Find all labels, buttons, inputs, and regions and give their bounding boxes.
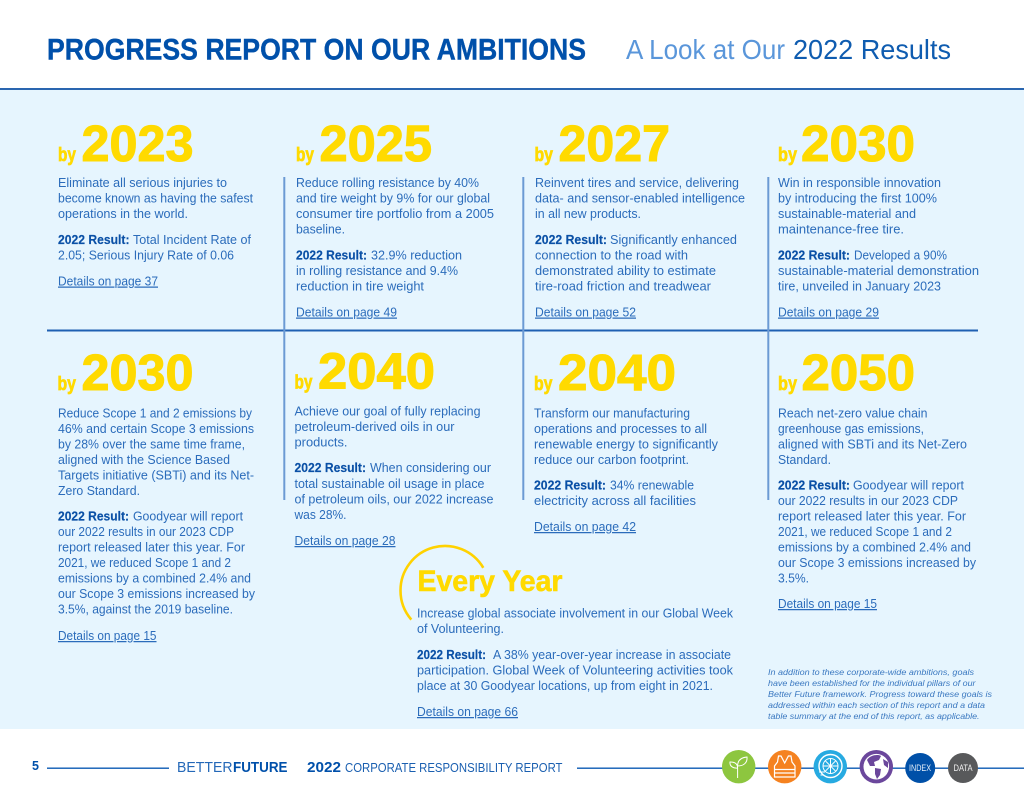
2022 result: 2022 Result: [58,233,130,247]
2022 result [296,248,462,294]
ambition text: and tire weight by 9% for our global [296,192,490,206]
2022 result: Goodyear will report [853,478,965,492]
panel: by 2027 [534,115,745,320]
icon: green sprout [722,750,755,783]
2022 result [58,233,252,262]
panel: by 2023 [58,115,254,288]
heading: by 2040: by [294,372,313,394]
2022 result: tire, unveiled in January 2023 [778,280,941,294]
heading: by 2030: by [778,145,797,166]
footer [32,750,1024,783]
icon: index button [905,753,935,783]
details link: Details on page 66 [417,705,518,719]
details link: Details on page 28 [294,534,396,548]
2022 result: demonstrated ability to estimate [535,264,716,278]
2022 result: in rolling resistance and 9.4% [296,264,458,278]
2022 result: tire-road friction and treadwear [535,280,711,294]
ambition text [294,404,481,450]
heading: by 2023: 2023 [82,115,194,172]
subtitle: 2022 Results [793,34,951,65]
text block: side note: Better Future framework. Progress toward these goals is [768,690,992,699]
2022 result: 2.05; Serious Injury Rate of 0.06 [58,248,234,262]
details link: Details on page 49 [296,306,397,320]
text block: side note: table summary at the end of this report, as applicable. [768,712,980,721]
2022 result: 2022 Result: [417,648,486,662]
2022 result: 2022 Result: [296,248,367,262]
ambition text: in all new products. [535,207,641,221]
2022 result: Significantly enhanced [610,233,737,247]
heading: by 2025: by [296,145,314,166]
ambition text [778,176,941,236]
ambition text: by 28% over the same time frame, [58,438,245,452]
2022 result: Total Incident Rate of [133,233,252,247]
2022 result: 2022 Result: [778,248,850,262]
ambition text [58,406,254,498]
grid dividers [47,177,978,500]
subtitle [626,34,951,65]
ambition text: Standard. [778,453,831,467]
2022 result [417,648,734,693]
ambition text: Targets initiative (SBTi) and its Net- [58,468,254,482]
ambition text: of Volunteering. [417,622,504,636]
2022 result [534,478,696,508]
ambition text: aligned with the Science Based [58,453,230,467]
ambition text: Transform our manufacturing [534,406,690,420]
footer brand [177,759,288,776]
footer report title: 2022 [307,759,341,776]
panel: by 2040 oils [294,342,494,548]
ambition text: data- and sensor-enabled intelligence [535,192,745,206]
2022 result [778,478,977,586]
ambition text [535,176,745,221]
ambition text: by introducing the first 100% [778,192,937,206]
2022 result [294,461,494,522]
icon: index button: INDEX [909,763,931,773]
ambition text: Achieve our goal of fully replacing [294,404,481,418]
icon: data button: DATA [954,763,972,773]
heading: every year: Every Year [418,565,563,598]
2022 result: 32.9% reduction [371,248,462,262]
ambition text [417,606,734,636]
details link: Details on page 29 [778,306,879,320]
2022 result: was 28%. [294,508,346,522]
2022 result [778,248,979,294]
heading: by 2040: by [534,374,553,395]
2022 result: our Scope 3 emissions increased by [778,556,977,570]
text block: side note: In addition to these corporate-wide ambitions, goals [768,668,974,677]
2022 result: 2022 Result: [778,478,850,492]
ambition text [534,406,719,467]
text block: side note [768,668,992,721]
text block: side note: addressed within each section of this report and a data [768,701,986,710]
2022 result: of petroleum oils, our 2022 increase [294,492,494,506]
text block: side note: have been established for the individual pillars of our [768,679,976,688]
ambition text [778,406,967,467]
2022 result: 2021, we reduced Scope 1 and 2 [778,525,952,539]
2022 result: sustainable-material demonstration [778,264,979,278]
2022 result: emissions by a combined 2.4% and [58,572,251,586]
heading: by 2050: by [778,374,797,395]
page number: 5 [32,759,39,773]
2022 result: 3.5%, against the 2019 baseline. [58,602,233,616]
ambition text: Eliminate all serious injuries to [58,176,227,190]
2022 result [58,510,256,616]
details link: Details on page 52 [535,306,636,320]
subtitle: A Look at Our [626,34,785,65]
ambition text: greenhouse gas emissions, [778,422,924,436]
2022 result: 3.5%. [778,572,809,586]
2022 result: connection to the road with [535,248,688,262]
ambition text: sustainable-material and [778,207,916,221]
heading: by 2023: by [58,145,76,166]
2022 result: 34% renewable [610,478,694,492]
footer brand: BETTER [177,759,233,776]
ambition text: baseline. [296,222,345,236]
2022 result: report released later this year. For [778,510,966,524]
footer report title: CORPORATE RESPONSIBILITY REPORT [345,760,563,775]
2022 result: 2021, we reduced Scope 1 and 2 [58,556,231,570]
ambition text: Win in responsible innovation [778,176,941,190]
heading: by 2030: 2030 [82,344,194,401]
2022 result: total sustainable oil usage in place [294,477,485,491]
panel: by 2025 [296,115,494,320]
2022 result: Developed a 90% [854,248,947,262]
details link: Details on page 42 [534,520,636,534]
details link: Details on page 15 [58,629,157,643]
2022 result: place at 30 Goodyear locations, up from eight in 2021. [417,679,713,693]
icon: blue tire [814,750,847,783]
title [47,34,951,66]
ambition text: Reduce Scope 1 and 2 emissions by [58,406,253,420]
heading: by 2025: 2025 [320,115,432,172]
heading: by 2040: 2040 [558,344,676,401]
ambition text: Increase global associate involvement in our Global Week [417,606,734,620]
ambition text: maintenance-free tire. [778,222,904,236]
2022 result: our Scope 3 emissions increased by [58,587,256,601]
2022 result: our 2022 results in our 2023 CDP [58,525,234,539]
footer report title [307,759,563,776]
ambition text: petroleum-derived oils in our [294,420,454,434]
2022 result: When considering our [370,461,491,475]
heading: by 2030: 2030 [801,115,915,172]
icon: yellow arc [400,546,483,620]
panel: by 2050 [778,344,977,611]
2022 result: 2022 Result: [534,478,606,492]
ambition text: 46% and certain Scope 3 emissions [58,422,254,436]
icon: purple globe [860,750,893,783]
ambition text: reduce our carbon footprint. [534,453,689,467]
heading: by 2050: 2050 [802,344,915,401]
icon: data button [948,753,978,783]
2022 result: report released later this year. For [58,540,245,554]
panel: by 2030 emissions [58,344,256,643]
ambition text: Zero Standard. [58,484,140,498]
2022 result: Goodyear will report [133,510,244,524]
heading: by 2040: 2040 [318,342,435,400]
2022 result: emissions by a combined 2.4% and [778,540,971,554]
ambition text: operations and processes to all [534,422,707,436]
ambition text: consumer tire portfolio from a 2005 [296,207,494,221]
heading: by 2027: by [534,145,553,166]
details link: Details on page 37 [58,274,158,288]
title: PROGRESS REPORT ON OUR AMBITIONS [47,34,586,66]
heading: by 2027: 2027 [558,115,670,172]
ambition text [58,176,254,221]
panel: by 2030 innovation [778,115,979,320]
footer brand: FUTURE [233,759,288,776]
2022 result: reduction in tire weight [296,280,425,294]
2022 result [535,233,737,294]
ambition text: aligned with SBTi and its Net-Zero [778,438,967,452]
panel: every year [400,546,734,719]
2022 result: 2022 Result: [58,510,129,524]
panel: by 2040 energy [534,344,719,534]
details link: Details on page 15 [778,597,877,611]
2022 result: our 2022 results in our 2023 CDP [778,494,958,508]
heading: by 2030: by [58,374,76,395]
ambition text: products. [294,436,348,450]
ambition text: Reach net-zero value chain [778,406,928,420]
ambition text: renewable energy to significantly [534,438,719,452]
ambition text: Reinvent tires and service, delivering [535,176,739,190]
ambition text [296,176,494,236]
2022 result: electricity across all facilities [534,494,696,508]
ambition text: become known as having the safest [58,192,254,206]
icon: orange safety vest [768,750,801,783]
2022 result: 2022 Result: [294,461,366,475]
ambition text: Reduce rolling resistance by 40% [296,176,479,190]
2022 result: 2022 Result: [535,233,607,247]
2022 result: A 38% year-over-year increase in associate [493,648,731,662]
2022 result: participation. Global Week of Volunteering activities took [417,664,734,678]
ambition text: operations in the world. [58,207,188,221]
